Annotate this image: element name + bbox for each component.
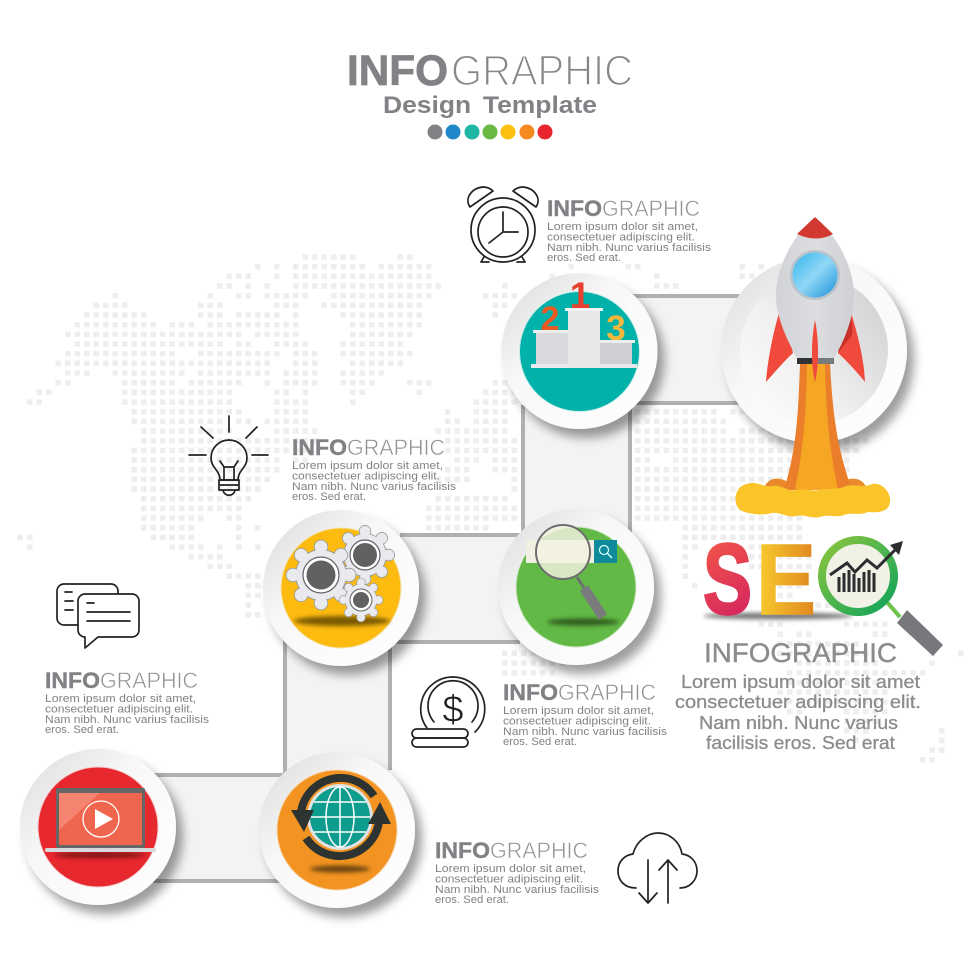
- text block: coins step: [503, 680, 668, 748]
- text block: clock step: consectetuer adipiscing elit.: [547, 232, 695, 244]
- text block: chat step: consectetuer adipiscing elit.: [45, 704, 193, 716]
- icon: search magnifier: [526, 525, 619, 626]
- text block: SEO: INFOGRAPHIC: [704, 638, 897, 668]
- letter E: E: [756, 524, 816, 636]
- icon: chat bubbles: [57, 584, 139, 648]
- text block: cloud step: INFO: [435, 838, 490, 863]
- icon: magnifier with chart: [822, 540, 943, 656]
- text block: bulb step: consectetuer adipiscing elit.: [292, 470, 440, 482]
- text block: bulb step: [292, 435, 457, 503]
- icon: podium: 1: [570, 275, 590, 316]
- text block: chat step: GRAPHIC: [100, 668, 198, 693]
- text block: cloud step: Nam nibh. Nunc varius facilisis: [435, 884, 600, 896]
- world dot map background: [18, 257, 968, 760]
- title: [347, 47, 633, 95]
- text block: clock step: GRAPHIC: [602, 196, 700, 221]
- title: GRAPHIC: [451, 47, 633, 95]
- text block: cloud step: Lorem ipsum dolor sit amet,: [435, 863, 586, 875]
- text block: chat step: Nam nibh. Nunc varius facilisis: [45, 714, 210, 726]
- panel: step 3 gears: [263, 510, 419, 666]
- panel: rocket launch: [721, 217, 907, 517]
- text block: coins step: INFO: [503, 680, 558, 705]
- panel: step 2 globe: [259, 752, 415, 908]
- text block: SEO: facilisis eros. Sed erat: [706, 732, 895, 753]
- text block: clock step: INFO: [547, 196, 602, 221]
- text block: SEO: [675, 638, 921, 753]
- icon: light bulb: [189, 416, 268, 495]
- text block: coins step: GRAPHIC: [558, 680, 656, 705]
- text block: clock step: [547, 196, 712, 264]
- text block: SEO: Nam nibh. Nunc varius: [699, 712, 898, 733]
- icon: podium: 2: [541, 300, 559, 338]
- icon: laptop with play button: [45, 788, 156, 858]
- text block: cloud step: GRAPHIC: [490, 838, 588, 863]
- panel: step 4 search: [498, 509, 654, 665]
- text block: bulb step: INFO: [292, 435, 347, 460]
- letter S: S: [703, 524, 752, 636]
- subtitle: Design Template: [383, 92, 597, 119]
- text block: bulb step: Lorem ipsum dolor sit amet,: [292, 460, 443, 472]
- icon: rocket: [736, 217, 890, 517]
- colour dots: [428, 124, 552, 140]
- text block: coins step: consectetuer adipiscing elit.: [503, 716, 651, 728]
- icon: podium: 3: [606, 309, 626, 348]
- text block: cloud step: [435, 838, 600, 906]
- text block: bulb step: GRAPHIC: [347, 435, 445, 460]
- icon: alarm clock: [468, 187, 538, 262]
- text block: clock step: Nam nibh. Nunc varius facilisis: [547, 242, 712, 254]
- icon: gears: [286, 526, 394, 626]
- icon: coins: [412, 677, 485, 747]
- text block: clock step: eros. Sed erat.: [547, 252, 621, 264]
- text block: coins step: eros. Sed erat.: [503, 736, 577, 748]
- stepped path band: [150, 296, 745, 881]
- text block: coins step: Nam nibh. Nunc varius facilisis: [503, 726, 668, 738]
- icon: rotating globe: [291, 778, 391, 872]
- icon: coins: $: [442, 689, 464, 731]
- text block: bulb step: eros. Sed erat.: [292, 491, 366, 503]
- panel: step 1 video: [20, 749, 176, 905]
- text block: chat step: Lorem ipsum dolor sit amet,: [45, 693, 196, 705]
- panel: step 5 podium: [502, 273, 658, 429]
- text block: clock step: Lorem ipsum dolor sit amet,: [547, 221, 698, 233]
- text block: SEO: consectetuer adipiscing elit.: [675, 691, 921, 712]
- text block: coins step: Lorem ipsum dolor sit amet,: [503, 705, 654, 717]
- text block: chat step: INFO: [45, 668, 100, 693]
- text block: cloud step: eros. Sed erat.: [435, 894, 509, 906]
- text block: chat step: [45, 668, 210, 736]
- title: INFO: [347, 47, 448, 95]
- text block: SEO: Lorem ipsum dolor sit amet: [681, 671, 920, 692]
- SEO logo: [703, 524, 943, 656]
- text block: bulb step: Nam nibh. Nunc varius facilisis: [292, 481, 457, 493]
- icon: podium: [531, 275, 637, 368]
- text block: chat step: eros. Sed erat.: [45, 724, 119, 736]
- text block: cloud step: consectetuer adipiscing elit.: [435, 874, 583, 886]
- icon: cloud with arrows: [618, 833, 697, 903]
